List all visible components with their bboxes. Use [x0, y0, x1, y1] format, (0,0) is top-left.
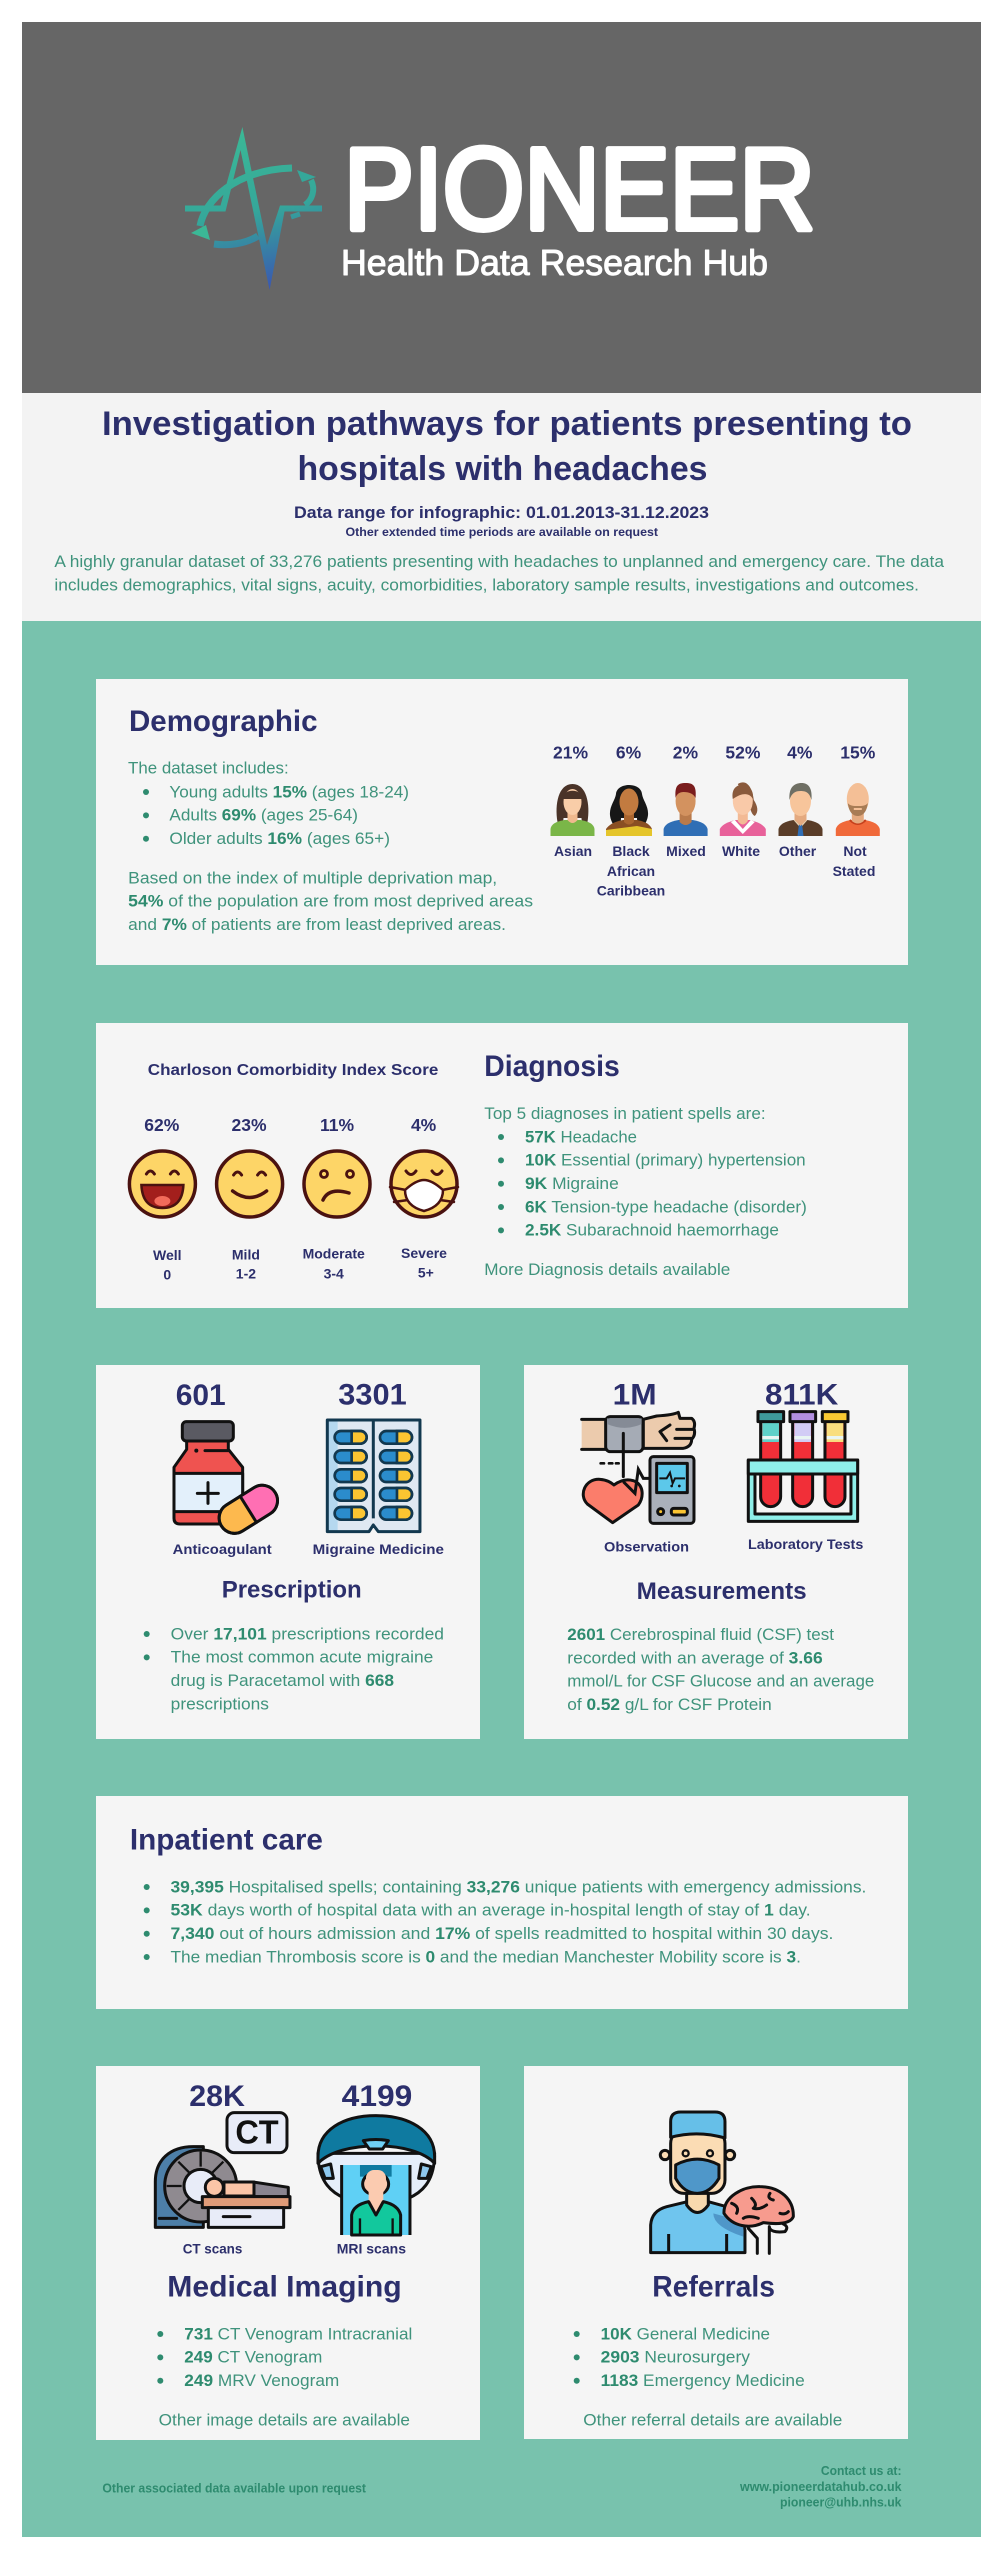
comorbidity labels: Mild	[232, 1246, 260, 1262]
ethnicity labels: Other	[779, 843, 817, 859]
heading: inpatient care: Inpatient care	[130, 1823, 323, 1856]
icon: black woman	[606, 785, 652, 836]
stat: migraine medicine count: 3301	[338, 1378, 407, 1411]
icon: mixed man	[664, 783, 708, 836]
ethnicity percentages: 15%	[840, 742, 876, 762]
age breakdown: Older adults 16% (ages 65+)	[169, 830, 390, 848]
diagnosis list	[484, 1105, 807, 1240]
inpatient list: 53K days worth of hospital data with an average in-hospital length of stay of 1 day.	[170, 1902, 811, 1920]
prescription labels: Migraine Medicine	[313, 1541, 444, 1557]
panel: diagnosis	[96, 1023, 908, 1308]
prescription list: The most common acute migraine	[171, 1649, 433, 1667]
comorbidity percentages: 23%	[231, 1115, 267, 1135]
extended periods note: Other extended time periods are available on request	[346, 525, 658, 539]
age breakdown	[128, 760, 409, 848]
measurement labels	[604, 1536, 864, 1555]
contact details: www.pioneerdatahub.co.uk	[739, 2480, 902, 2494]
imaging note: Other image details are available	[159, 2411, 410, 2429]
comorbidity percentages: 4%	[411, 1115, 437, 1135]
icon: asian woman	[550, 784, 594, 836]
imaging list	[157, 2325, 412, 2390]
heading: referrals: Referrals	[652, 2271, 775, 2304]
imaging list: 249 MRV Venogram	[184, 2372, 339, 2390]
referrals note: Other referral details are available	[583, 2411, 842, 2429]
panel: medical imaging	[96, 2066, 480, 2440]
inpatient list: 39,395 Hospitalised spells; containing 33,276 unique patients with emergency admissions.	[170, 1878, 866, 1896]
prescription list: prescriptions	[171, 1695, 269, 1713]
ethnicity labels: African	[607, 863, 655, 879]
ethnicity percentages: 6%	[616, 742, 642, 762]
heading: demographic: Demographic	[129, 705, 318, 738]
age breakdown: Young adults 15% (ages 18-24)	[169, 783, 409, 801]
intro paragraph: A highly granular dataset of 33,276 patients presenting with headaches to unplanned and emergency care. The data	[54, 553, 945, 571]
stat: observation count: 1M	[613, 1378, 657, 1411]
prescription labels	[173, 1541, 444, 1557]
measurements text: recorded with an average of 3.66	[567, 1649, 823, 1667]
footer note: Other associated data available upon request	[102, 2482, 367, 2496]
diagnosis list: 9K Migraine	[525, 1175, 619, 1193]
diagnosis list: 6K Tension-type headache (disorder)	[525, 1198, 807, 1216]
imaging list: 731 CT Venogram Intracranial	[184, 2325, 412, 2343]
referrals list: 1183 Emergency Medicine	[601, 2372, 805, 2390]
diagnosis list: 10K Essential (primary) hypertension	[525, 1152, 806, 1170]
measurements text: 2601 Cerebrospinal fluid (CSF) test	[567, 1626, 834, 1644]
icon: laboratory test tubes	[748, 1412, 858, 1521]
panel: measurements	[524, 1365, 908, 1739]
prescription list	[144, 1625, 444, 1713]
diagnosis note: More Diagnosis details available	[484, 1261, 730, 1279]
heading: diagnosis: Diagnosis	[484, 1050, 620, 1083]
comorbidity percentages: 62%	[144, 1115, 180, 1135]
icon: masked face	[390, 1151, 458, 1217]
ethnicity percentages: 21%	[553, 742, 588, 762]
diagnosis list: 57K Headache	[525, 1128, 637, 1146]
comorbidity labels: Severe	[401, 1245, 447, 1261]
comorbidity percentages: 11%	[320, 1115, 354, 1135]
icon: smiling face	[217, 1151, 283, 1217]
age breakdown: Adults 69% (ages 25-64)	[169, 807, 358, 825]
icon: white woman	[720, 782, 766, 836]
icon: blister pack	[327, 1420, 420, 1532]
comorbidity labels: 1-2	[236, 1266, 256, 1282]
imaging list: 249 CT Venogram	[184, 2349, 322, 2367]
title	[102, 405, 912, 488]
inpatient list: 7,340 out of hours admission and 17% of spells readmitted to hospital within 30 days.	[170, 1925, 833, 1943]
deprivation text: 54% of the population are from most deprived areas	[128, 893, 533, 911]
measurements text: of 0.52 g/L for CSF Protein	[567, 1696, 772, 1714]
imaging labels: MRI scans	[337, 2240, 406, 2256]
stat: anticoagulant count: 601	[176, 1379, 226, 1412]
icon: not stated man	[836, 783, 880, 836]
ethnicity percentages	[553, 742, 876, 762]
icon: surgeon with brain	[651, 2112, 793, 2253]
contact details: Contact us at:	[821, 2464, 902, 2478]
inpatient list: The median Thrombosis score is 0 and the median Manchester Mobility score is 3.	[170, 1948, 801, 1966]
diagnosis list: Top 5 diagnoses in patient spells are:	[484, 1105, 766, 1123]
icon: frowning face	[304, 1151, 370, 1217]
stat: laboratory tests count: 811K	[765, 1378, 839, 1411]
measurement labels: Observation	[604, 1539, 689, 1555]
deprivation text	[128, 869, 533, 934]
logo wordmark: PIONEER	[344, 124, 815, 254]
ethnicity labels: Caribbean	[597, 883, 665, 899]
logo subtitle: Health Data Research Hub	[341, 242, 768, 283]
heading: medical imaging: Medical Imaging	[167, 2271, 402, 2304]
referrals list: 10K General Medicine	[601, 2325, 770, 2343]
title: Investigation pathways for patients presenting to	[102, 405, 912, 443]
data range: Data range for infographic: 01.01.2013-31.12.2023	[294, 503, 709, 522]
contact details	[739, 2464, 902, 2510]
heading: prescription: Prescription	[222, 1576, 362, 1603]
ethnicity percentages: 4%	[787, 742, 813, 762]
referrals list	[574, 2325, 805, 2390]
measurements text	[567, 1626, 874, 1714]
header banner	[22, 22, 981, 393]
comorbidity labels: 0	[163, 1267, 171, 1283]
chart title: charlson comorbidity index: Charloson Comorbidity Index Score	[148, 1062, 438, 1079]
ethnicity percentages: 52%	[725, 742, 761, 762]
imaging labels	[183, 2240, 406, 2256]
diagnosis list: 2.5K Subarachnoid haemorrhage	[525, 1222, 779, 1240]
ethnicity labels: Not	[843, 843, 867, 859]
measurements text: mmol/L for CSF Glucose and an average	[567, 1673, 874, 1691]
title panel	[22, 393, 981, 621]
prescription list: drug is Paracetamol with 668	[171, 1672, 394, 1690]
age breakdown: The dataset includes:	[128, 760, 289, 778]
deprivation text: Based on the index of multiple deprivation map,	[128, 869, 497, 887]
icon: ct scanner: CT	[235, 2115, 279, 2152]
comorbidity percentages	[144, 1115, 437, 1135]
prescription labels: Anticoagulant	[173, 1541, 272, 1557]
panel: referrals	[524, 2066, 908, 2439]
panel: demographic	[96, 679, 908, 965]
intro paragraph: includes demographics, vital signs, acuity, comorbidities, laboratory sample results, investigations and outcomes.	[54, 577, 919, 595]
icon: other man	[778, 783, 822, 836]
title: hospitals with headaches	[298, 450, 708, 488]
ethnicity labels: Stated	[833, 863, 875, 879]
teal background panel	[22, 621, 981, 2537]
icon: pioneer logo mark	[185, 127, 322, 290]
icon: ct scanner	[155, 2113, 290, 2227]
contact details: pioneer@uhb.nhs.uk	[780, 2496, 902, 2510]
deprivation text: and 7% of patients are from least deprived areas.	[128, 916, 506, 934]
imaging labels: CT scans	[183, 2240, 243, 2256]
ethnicity labels: Asian	[554, 843, 592, 859]
ethnicity percentages: 2%	[673, 742, 698, 762]
heading: measurements: Measurements	[637, 1578, 807, 1605]
intro paragraph	[54, 553, 945, 595]
icon: laughing face	[129, 1151, 195, 1217]
ethnicity labels: Mixed	[666, 843, 706, 859]
measurement labels: Laboratory Tests	[748, 1536, 864, 1552]
ethnicity labels: Black	[612, 843, 650, 859]
panel: inpatient care	[96, 1796, 908, 2009]
prescription list: Over 17,101 prescriptions recorded	[171, 1625, 444, 1643]
panel: prescription	[96, 1365, 480, 1739]
icon: blood pressure monitor	[582, 1412, 695, 1523]
icon: mri scanner	[318, 2116, 435, 2235]
comorbidity labels: Moderate	[303, 1246, 365, 1262]
icon: medicine bottle and capsule	[174, 1422, 283, 1539]
referrals list: 2903 Neurosurgery	[601, 2349, 751, 2367]
ethnicity labels	[554, 843, 875, 899]
stat: ct scans count: 28K	[189, 2080, 245, 2113]
stat: mri scans count: 4199	[342, 2080, 412, 2113]
comorbidity labels	[153, 1245, 447, 1283]
inpatient list	[144, 1878, 866, 1966]
comorbidity labels: 5+	[418, 1265, 434, 1281]
ethnicity labels: White	[722, 843, 760, 859]
comorbidity labels: 3-4	[324, 1265, 344, 1281]
comorbidity labels: Well	[153, 1247, 182, 1263]
